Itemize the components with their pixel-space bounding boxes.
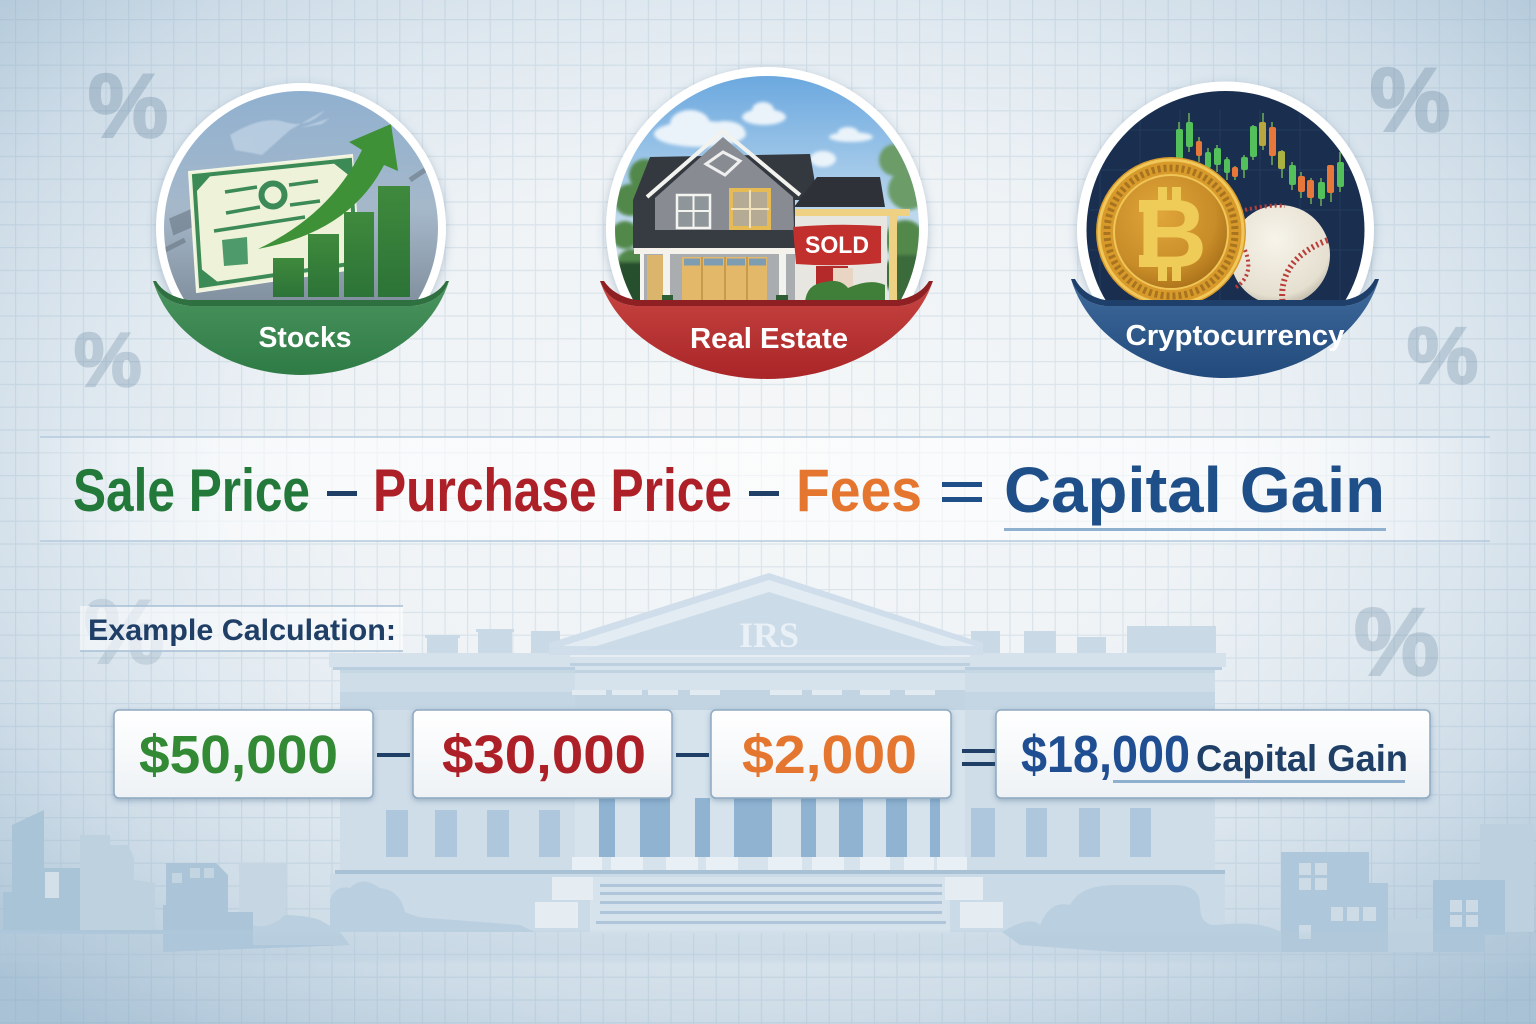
- real estate illustration: [615, 76, 919, 300]
- minus: [327, 491, 357, 496]
- illustration: IRS building and skyline: [0, 573, 1536, 962]
- green banner: [153, 281, 449, 375]
- skyline right: [1281, 824, 1534, 952]
- box: fees value: $2,000: [742, 725, 917, 785]
- stock certificate: [189, 155, 360, 292]
- decorative percent signs: %: [1354, 589, 1439, 696]
- minus: [377, 753, 410, 757]
- blue banner: [1071, 279, 1379, 378]
- wing windows: [386, 808, 1151, 857]
- equals: [962, 749, 995, 766]
- house: [633, 131, 910, 307]
- panel: stocks medallion: [150, 83, 450, 375]
- growth arrow: [258, 124, 398, 249]
- steps: [535, 877, 1003, 933]
- label: cryptocurrency: Cryptocurrency: [1126, 320, 1344, 352]
- candlestick chart: [1176, 113, 1344, 206]
- stocks illustration: [164, 91, 438, 306]
- decorative percent signs: %: [1407, 311, 1478, 400]
- bitcoin coin: B: [1137, 179, 1207, 288]
- formula band: [40, 437, 1490, 541]
- crypto illustration: [1086, 91, 1364, 300]
- white ring: [601, 66, 934, 304]
- decorative percent signs: %: [84, 583, 164, 683]
- box: capital gain value: Capital Gain: [1196, 738, 1408, 779]
- box: capital gain value: $18,000: [1021, 726, 1190, 784]
- panel: real estate medallion: [600, 67, 940, 389]
- sold sign: [793, 225, 881, 265]
- white ring: [152, 82, 451, 300]
- ground haze: [0, 932, 1536, 962]
- baseball: [1230, 205, 1330, 306]
- formula: sale price: Sale Price: [73, 457, 310, 524]
- decorative percent signs: %: [74, 318, 142, 403]
- calculation row: [114, 710, 1430, 798]
- minus: [749, 491, 779, 496]
- clouds: [654, 102, 873, 167]
- bitcoin coin: [1096, 157, 1246, 307]
- example calculation label: [80, 606, 403, 651]
- bushes: [253, 882, 1281, 952]
- label: stocks: Stocks: [258, 322, 352, 354]
- box: capital gain value: [996, 710, 1430, 798]
- trees: [611, 144, 928, 308]
- red banner: [600, 281, 933, 379]
- decorative percent signs: %: [88, 57, 168, 157]
- label: real estate: Real Estate: [690, 323, 848, 355]
- panel: cryptocurrency medallion: [1071, 82, 1380, 378]
- sold sign: SOLD: [805, 232, 869, 259]
- box: sale price value: [114, 710, 373, 798]
- entablature: [340, 692, 575, 710]
- equals: [942, 482, 982, 502]
- minus: [676, 753, 709, 757]
- box: purchase price value: $30,000: [442, 725, 646, 785]
- irs text: IRS: [739, 615, 799, 655]
- skyline left: [0, 810, 350, 952]
- bar chart: [273, 186, 410, 297]
- box: fees value: [711, 710, 951, 798]
- formula: capital gain: Capital Gain: [1004, 454, 1385, 526]
- white ring: [1072, 80, 1378, 306]
- decorative percent signs: [74, 51, 1478, 696]
- pediment: [549, 573, 983, 655]
- box: sale price value: $50,000: [139, 725, 338, 785]
- decorative percent signs: %: [1370, 51, 1450, 151]
- example calculation label: Example Calculation:: [88, 614, 396, 647]
- formula: fees: Fees: [796, 457, 922, 524]
- building: [253, 573, 1281, 952]
- box: purchase price value: [413, 710, 672, 798]
- columns: [599, 798, 940, 857]
- formula: purchase price: Purchase Price: [373, 457, 732, 524]
